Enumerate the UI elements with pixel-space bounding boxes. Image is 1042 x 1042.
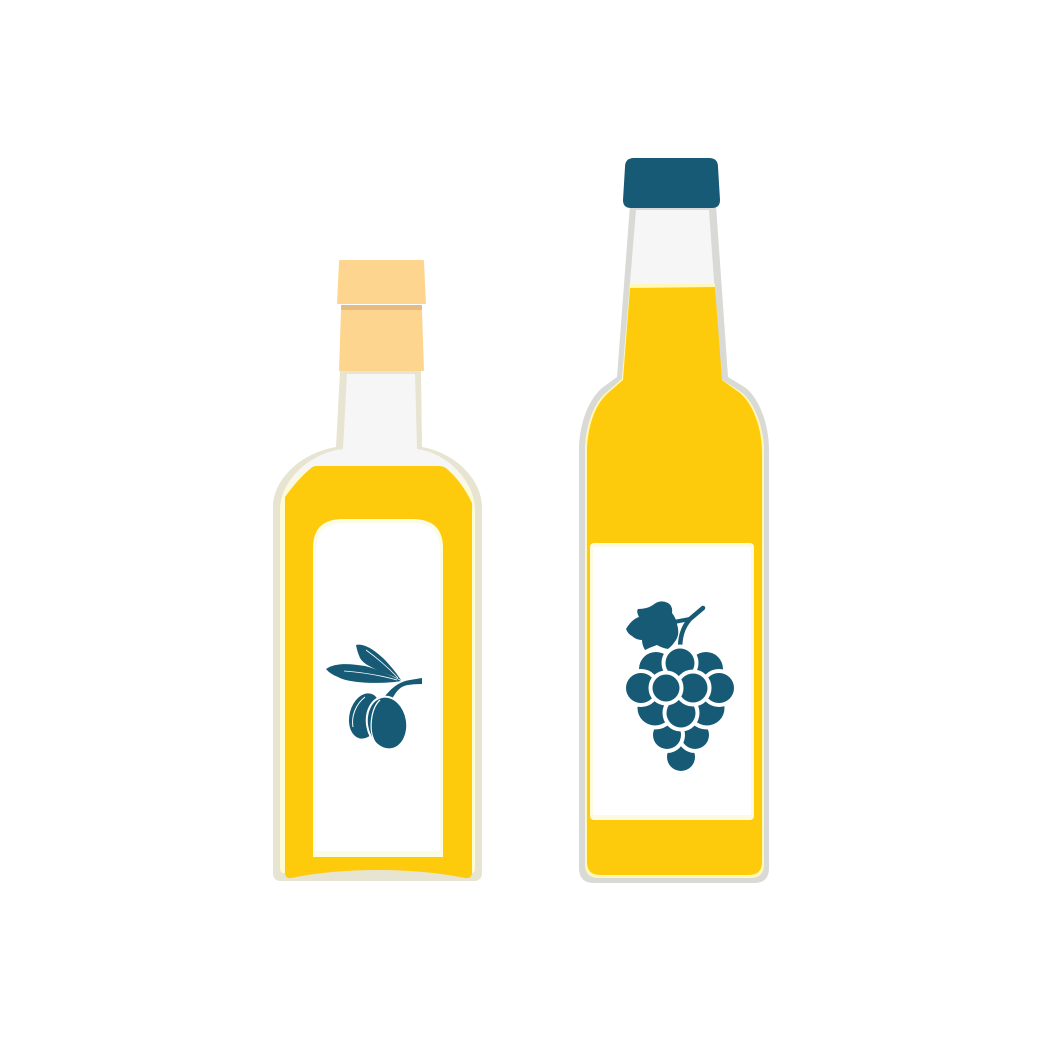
glass interior: [280, 374, 475, 873]
glass outline: [273, 371, 482, 881]
olive back: [344, 690, 386, 742]
grapes: [667, 743, 695, 771]
cap: [623, 158, 720, 208]
leaf lower: [326, 664, 401, 683]
stem: [680, 608, 703, 650]
olive front: [364, 695, 410, 751]
icon: grapes: [626, 601, 734, 771]
leaf upper: [356, 645, 401, 680]
olive oil bottle: [273, 260, 482, 881]
icon: olive branch: [326, 645, 422, 751]
glass outline: [579, 205, 769, 883]
stem: [385, 678, 422, 699]
cork: [337, 260, 426, 371]
olive oil: [285, 466, 472, 878]
glass interior: [585, 210, 764, 878]
white wine bottle: [579, 158, 769, 883]
vine leaf: [626, 601, 678, 650]
label: grape: [590, 543, 754, 820]
white wine: [587, 287, 762, 875]
label: olive: [313, 519, 443, 857]
